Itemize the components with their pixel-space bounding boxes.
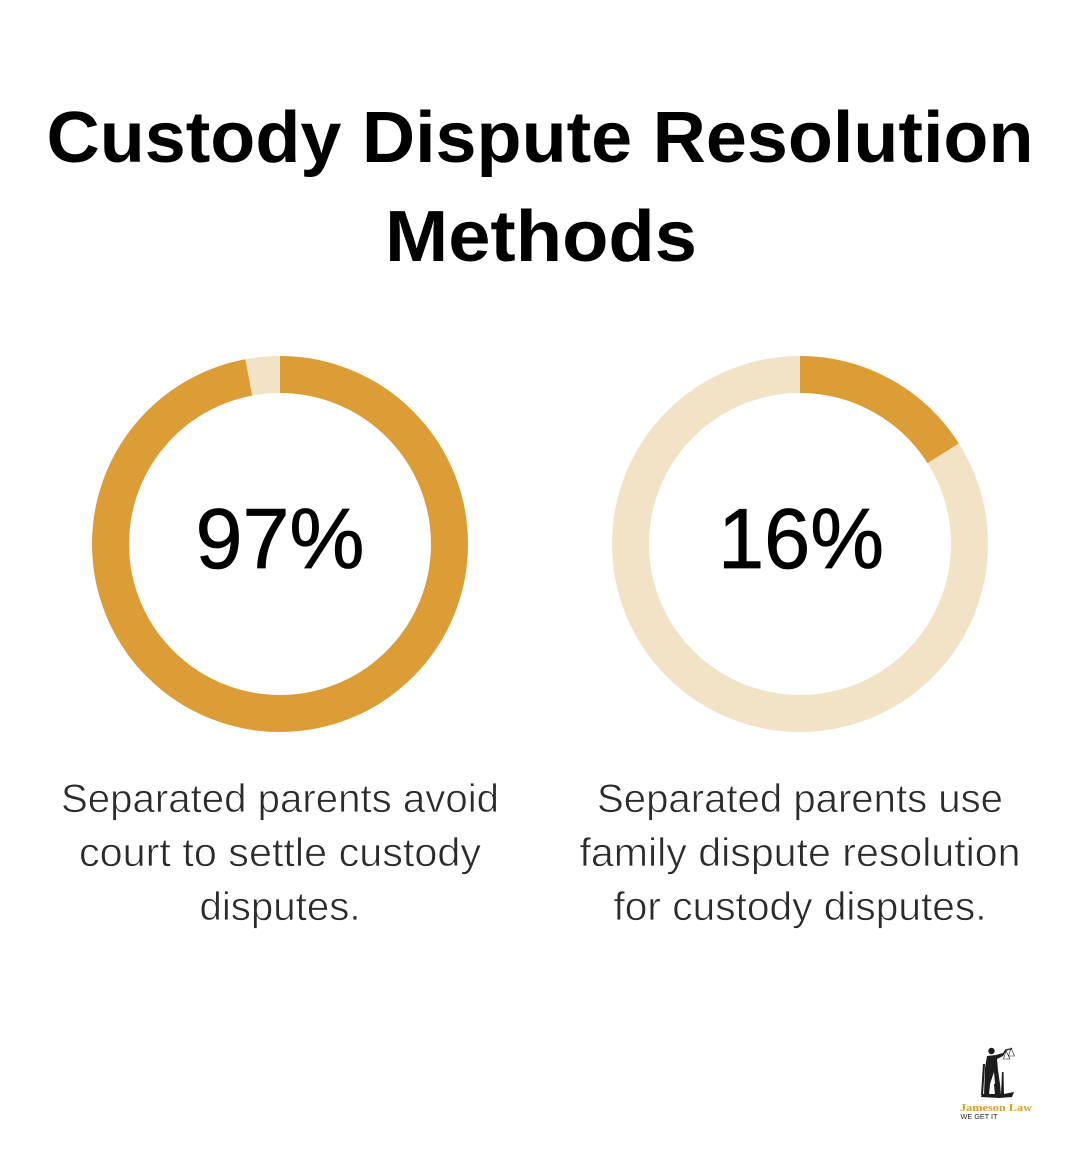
description: family dispute resolution: family dispute resolution (580, 831, 1020, 875)
description: avoid court (61, 777, 499, 929)
donut chart: 16% (630, 374, 970, 714)
panel: 97 percent avoid court (61, 374, 499, 929)
donut chart: 97% (110, 374, 450, 714)
panel: 16 percent use family dispute resolution (580, 374, 1020, 929)
stat: 16%: 16% (718, 492, 884, 587)
description: family dispute resolution: Separated parents use (597, 777, 1003, 821)
icon: lady justice (981, 1048, 1014, 1098)
title: Methods (385, 197, 697, 277)
description: avoid court: court to settle custody (79, 831, 481, 875)
logo tagline: WE GET IT (960, 1112, 998, 1121)
logo: Jameson Law (960, 1048, 1032, 1121)
title: Custody Dispute Resolution (46, 98, 1034, 178)
stat: 97%: 97% (196, 492, 364, 587)
logo name: Jameson Law (960, 1102, 1032, 1114)
description: avoid court: disputes. (200, 885, 360, 929)
description: family dispute resolution (580, 777, 1020, 929)
description: family dispute resolution: for custody disputes. (614, 885, 986, 929)
description: avoid court: Separated parents avoid (61, 777, 499, 821)
title (46, 98, 1034, 277)
